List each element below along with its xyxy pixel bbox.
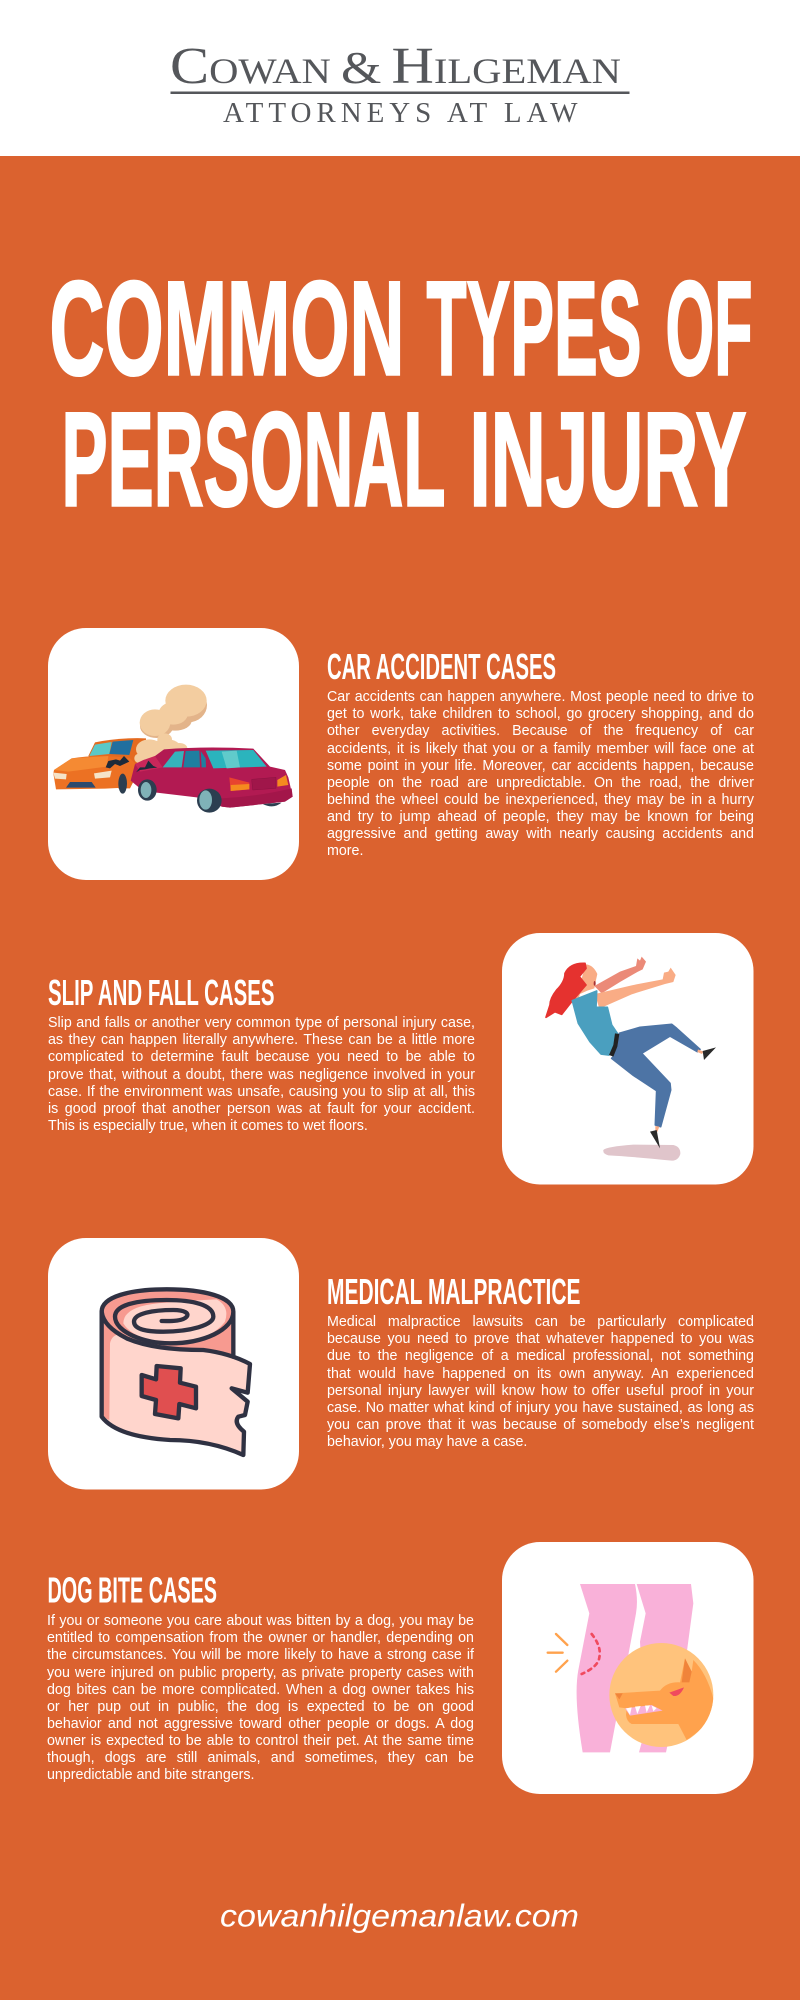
logo: firm name: COWAN & HILGEMAN <box>170 38 621 95</box>
heading: dog bite cases: DOG BITE CASES <box>48 1570 217 1611</box>
panel: medical malpractice <box>48 1238 754 1490</box>
text: car accident paragraph: other everyday activities. Because of the frequency of car <box>327 723 754 739</box>
card: dog bite <box>502 1542 754 1794</box>
text: dog bite paragraph: or her pup out in public, the dog is expected to be on good <box>47 1699 474 1715</box>
text: slip and fall paragraph: prove that, without a doubt, there was negligence involved in your <box>48 1067 475 1083</box>
text: dog bite paragraph: behavior and not aggressive toward other people or dogs. A dog <box>47 1716 474 1732</box>
logo: tagline: ATTORNEYS AT LAW <box>223 97 578 129</box>
text: slip and fall paragraph: complicated to determine fault because you need to be able to <box>48 1049 475 1065</box>
illustration: falling woman <box>546 957 716 1161</box>
panel: car accident cases <box>48 628 754 880</box>
illustration: crashed cars with smoke <box>53 685 293 813</box>
heading: slip and fall cases: SLIP AND FALL CASES <box>48 972 274 1013</box>
text: slip and fall paragraph: is good proof that another person was at fault for your accident. <box>48 1101 475 1117</box>
panel: slip and fall cases <box>48 933 754 1184</box>
text: dog bite paragraph: you were injured on public property, as private property cases with <box>47 1665 474 1681</box>
illustration: dog biting leg <box>548 1584 717 1752</box>
text: medical malpractice paragraph: because you need to prove that whatever happened to you was <box>327 1331 754 1347</box>
text: car accident paragraph: accidents, it is likely that you or a family member will face one at <box>327 741 754 757</box>
text: car accident paragraph <box>327 689 754 859</box>
text: dog bite paragraph: entitled to compensation from the owner or handler, depending on <box>47 1630 474 1646</box>
text: slip and fall paragraph: case. If the environment was unsafe, causing you to slip at all, this <box>48 1084 475 1100</box>
text: medical malpractice paragraph: Medical malpractice lawsuits can be particularly complicated <box>327 1314 754 1330</box>
text: slip and fall paragraph <box>48 1015 475 1134</box>
text: slip and fall paragraph: Slip and falls or another very common type of personal injury case, <box>48 1015 475 1031</box>
text: dog bite paragraph: dog bites can be more complicated. When a dog owner takes his <box>47 1682 474 1698</box>
text: medical malpractice paragraph: that would have happened on its own anyway. An experienced <box>327 1366 754 1382</box>
text: car accident paragraph: aggressive and getting away with nearly causing accidents and <box>327 826 754 842</box>
card: car accident <box>48 628 299 880</box>
text: dog bite paragraph: the circumstances. You will be more likely to have a strong case if <box>47 1647 474 1663</box>
text: car accident paragraph: get to work, take children to school, go grocery shopping, and do <box>327 706 754 722</box>
illustration: bandage roll <box>102 1289 250 1455</box>
title: PERSONAL <box>62 386 446 534</box>
heading: car accident cases: CAR ACCIDENT CASES <box>327 646 556 687</box>
text: dog bite paragraph: owner is expected to be able to control their pet. At the same time <box>47 1733 474 1749</box>
text: medical malpractice paragraph: behavior, you may have a case. <box>327 1434 527 1450</box>
text: car accident paragraph: more. <box>327 843 363 859</box>
text: dog bite paragraph: unpredictable and bite strangers. <box>47 1767 255 1783</box>
text: car accident paragraph: Car accidents can happen anywhere. Most people need to drive to <box>327 689 754 705</box>
text: car accident paragraph: and try to jump ahead of people, they may be known for being <box>327 809 754 825</box>
text: dog bite paragraph: though, dogs are still animals, and sometimes, they can be <box>47 1750 474 1766</box>
footer: website: cowanhilgemanlaw.com <box>220 1898 579 1934</box>
card: slip and fall <box>502 933 754 1184</box>
panel: dog bite cases <box>47 1542 754 1794</box>
text: car accident paragraph: behind the wheel could be inexperienced, they may be in a hurry <box>327 792 754 808</box>
text: slip and fall paragraph: as they can happen literally anywhere. These can be a little more <box>48 1032 475 1048</box>
title: COMMON <box>50 254 404 404</box>
title <box>50 254 752 534</box>
text: medical malpractice paragraph: due to the negligence of a medical professional, not something <box>327 1348 754 1364</box>
heading: medical malpractice: MEDICAL MALPRACTICE <box>327 1271 580 1312</box>
text: medical malpractice paragraph: personal injury lawyer will know how to offer useful proof in your <box>327 1383 754 1399</box>
text: dog bite paragraph: If you or someone you care about was bitten by a dog, you may be <box>47 1613 474 1629</box>
text: medical malpractice paragraph: case. No matter what kind of injury you have sustained, as long as <box>327 1400 754 1416</box>
header: logo band <box>0 0 800 156</box>
text: car accident paragraph: people on the road are unpredictable. On the road, the driver <box>327 775 754 791</box>
text: car accident paragraph: some point in your life. Moreover, car accidents happen, because <box>327 758 754 774</box>
text: medical malpractice paragraph: you can prove that it was because of somebody else’s negligent <box>327 1417 754 1433</box>
text: slip and fall paragraph: This is especially true, when it comes to wet floors. <box>48 1118 368 1134</box>
card: medical malpractice <box>48 1238 299 1490</box>
text: dog bite paragraph <box>47 1613 474 1783</box>
text: medical malpractice paragraph <box>327 1314 754 1450</box>
